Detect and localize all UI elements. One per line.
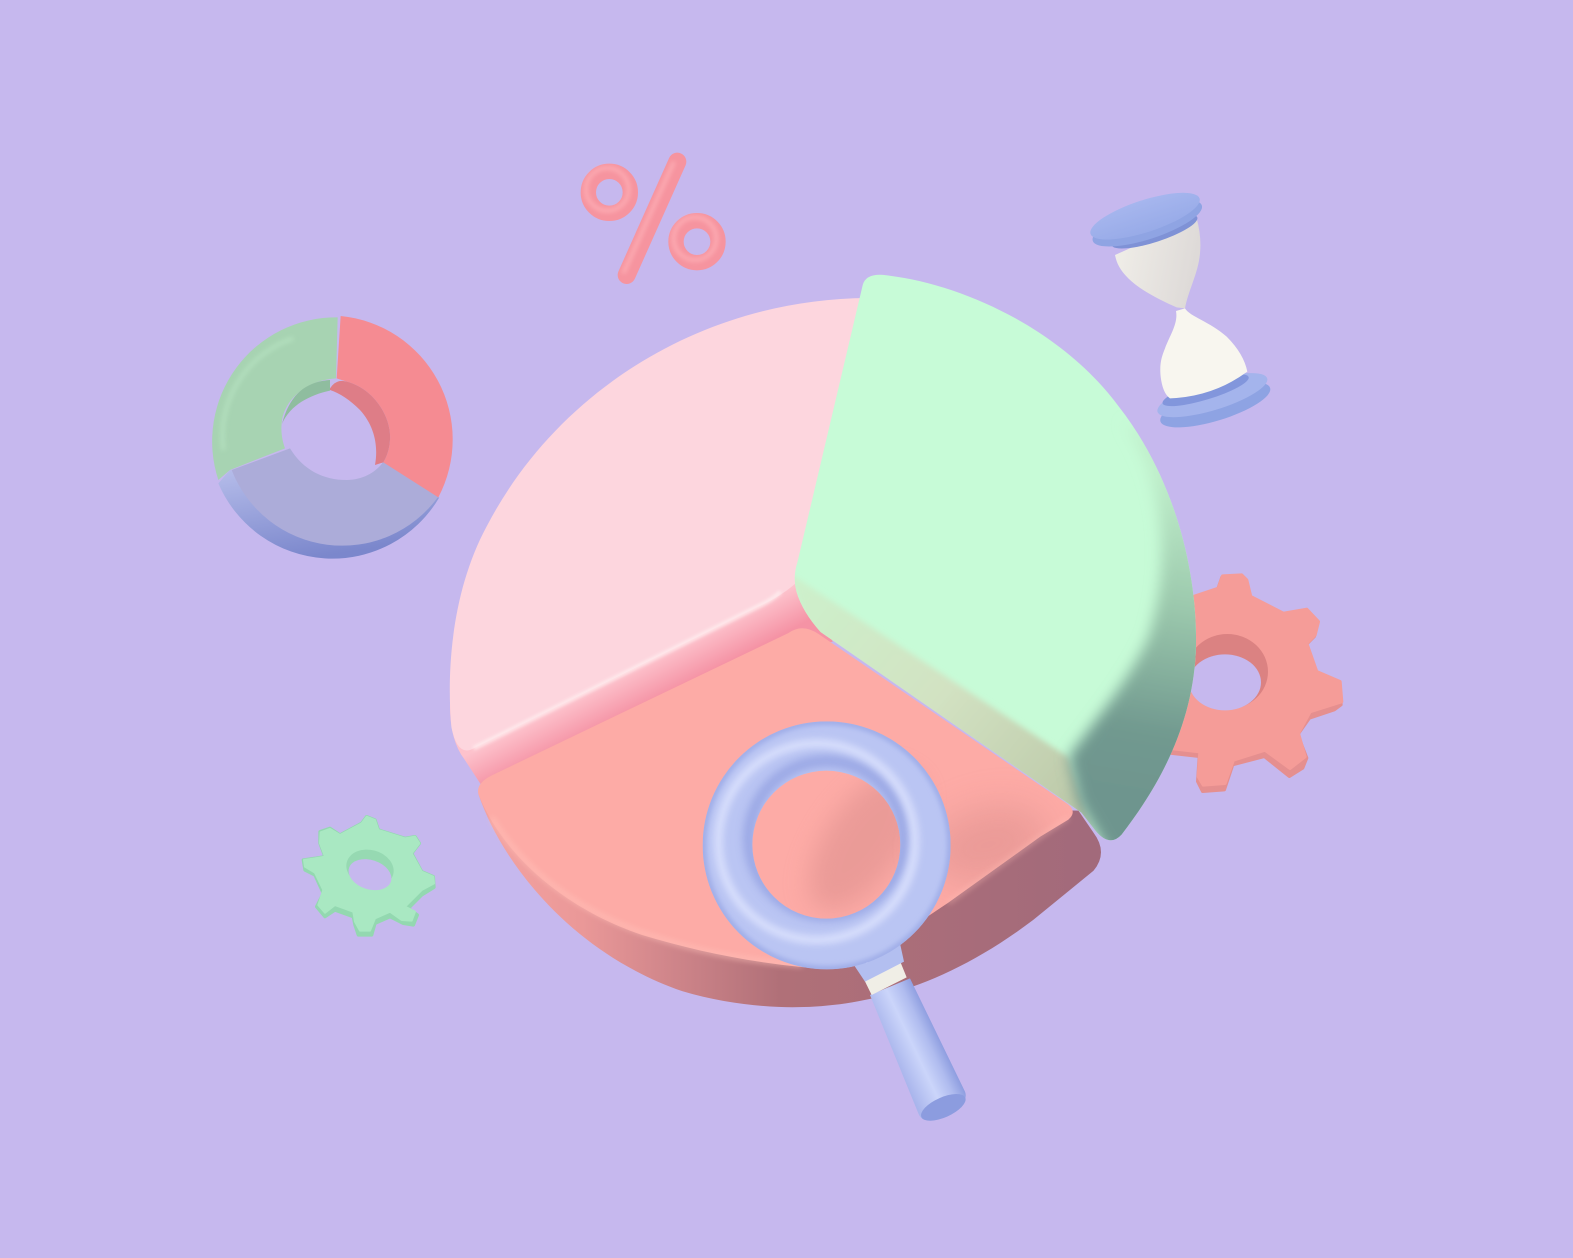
magnifier handle (870, 978, 966, 1120)
donut segment: green (212, 317, 338, 480)
salmon edge highlight (492, 818, 803, 965)
gear hole inner wall (1187, 634, 1268, 709)
gear hole inner wall (342, 844, 398, 892)
icon: small green gear (303, 817, 434, 935)
icon: magnifying glass (703, 721, 969, 1126)
salmon slice top face (478, 628, 1073, 967)
donut segment: blue (232, 448, 438, 546)
donut side wall (218, 470, 439, 559)
pink slice lower edge (450, 577, 833, 785)
green slice base (795, 275, 1196, 840)
illustration: pie chart with floating icons (212, 152, 1344, 1121)
percent upper ring (586, 168, 630, 213)
gear hole (1189, 654, 1261, 710)
magnifier ring (703, 721, 951, 969)
icon: percent sign (586, 162, 718, 275)
chart: small donut (212, 316, 453, 559)
donut segment: red (330, 316, 453, 497)
pie slice: salmon (478, 628, 1101, 1007)
hourglass top cap (1086, 183, 1208, 260)
gear hole (345, 854, 395, 895)
shadow of magnifier on slice (809, 784, 1044, 910)
pie slice: pink (450, 298, 868, 785)
icon: large salmon gear (1136, 575, 1342, 791)
hourglass bottom cap (1153, 363, 1275, 437)
hourglass lower glass (1160, 308, 1247, 398)
icon: hourglass (1086, 183, 1275, 437)
pink slice top face (450, 298, 868, 750)
magnifier neck (848, 935, 904, 982)
percent slash (623, 162, 677, 275)
hourglass upper glass (1115, 218, 1200, 308)
green slice lower inner edge (788, 572, 1093, 833)
pie slice: green (794, 274, 1196, 840)
green slice side wall (1062, 444, 1196, 840)
percent lower ring (674, 217, 718, 263)
salmon slice side wall (479, 795, 1101, 1007)
magnifier collar (864, 963, 907, 995)
